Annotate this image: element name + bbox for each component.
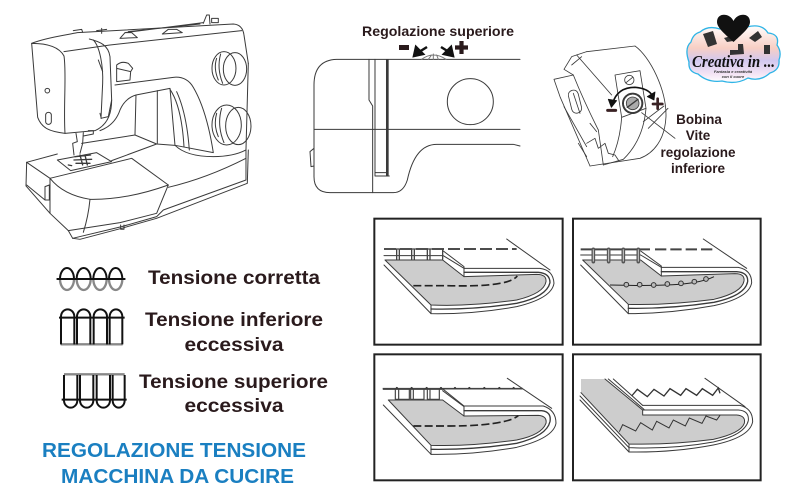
label: tensione inferiore eccessiva <box>145 310 323 356</box>
icon: minus <box>608 106 616 115</box>
logo heart <box>717 15 750 42</box>
icon: adjustment screw <box>623 94 642 113</box>
icon: plus sign <box>455 41 468 54</box>
heading: regolazione superiore: Regolazione superiore <box>362 23 514 39</box>
icon: tension knob <box>422 54 446 59</box>
labels: bobina and vite regolazione inferiore: Bobina <box>676 112 722 127</box>
panel: correct stitch fabric <box>374 219 563 345</box>
title: MACCHINA DA CUCIRE <box>61 466 294 488</box>
icon: top dial <box>212 52 236 85</box>
icon: bottom dial <box>212 105 241 145</box>
illustration: sewing machine <box>26 15 251 239</box>
illustration: top tension view <box>310 54 520 193</box>
labels: bobina and vite regolazione inferiore: regolazione <box>660 145 736 160</box>
fabric <box>383 378 556 454</box>
label: tensione inferiore eccessiva: Tensione inferiore <box>145 310 323 331</box>
top stitches <box>655 246 715 252</box>
top stitches <box>384 246 517 251</box>
labels: bobina and vite regolazione inferiore <box>660 112 736 176</box>
label: tensione superiore eccessiva: eccessiva <box>184 396 284 417</box>
label: tensione inferiore eccessiva: eccessiva <box>184 335 284 356</box>
bobbin stitches <box>610 277 714 285</box>
icon: minus sign <box>399 45 409 50</box>
bottom zigzag stitches <box>619 415 720 432</box>
fabric <box>384 239 554 314</box>
bobbin stitches <box>413 276 517 286</box>
panel: lower tension fabric <box>573 219 761 345</box>
arrow: adjustment arc <box>613 87 653 103</box>
arrow: right <box>441 47 453 56</box>
illustration: bobbin case <box>554 46 675 166</box>
label: tensione superiore eccessiva <box>139 372 328 417</box>
icon: presser foot <box>73 131 93 155</box>
logo cloud <box>687 25 780 82</box>
icon: plus <box>653 99 662 109</box>
logo name: Creativa in ... <box>692 52 775 71</box>
icon: thread guide <box>117 62 133 82</box>
fabric <box>580 378 753 452</box>
labels: bobina and vite regolazione inferiore: Vite <box>686 128 711 143</box>
title: REGOLAZIONE TENSIONE <box>42 440 306 462</box>
fabric <box>581 239 752 314</box>
arrow: left <box>414 47 427 56</box>
label: tensione superiore eccessiva: Tensione superiore <box>139 372 328 393</box>
logo tagline second line: con il cuore <box>722 74 745 79</box>
panel: zigzag fabric <box>573 354 761 480</box>
top stitches <box>383 386 523 391</box>
logo: Creativa in <box>687 15 780 82</box>
top zigzag stitches <box>632 388 720 397</box>
label: tensione corretta: Tensione corretta <box>148 268 320 289</box>
icon: correct tension stitches <box>57 268 125 290</box>
panel: upper tension fabric <box>374 354 563 480</box>
labels: bobina and vite regolazione inferiore: inferiore <box>671 161 725 176</box>
bobbin stitches <box>413 416 518 426</box>
logo tagline: Fantasia e creatività <box>714 69 753 74</box>
icon: upper tension excessive stitches <box>62 374 127 408</box>
icon: lower tension excessive stitches <box>59 309 125 344</box>
logo icons <box>703 31 770 55</box>
title <box>42 440 306 488</box>
